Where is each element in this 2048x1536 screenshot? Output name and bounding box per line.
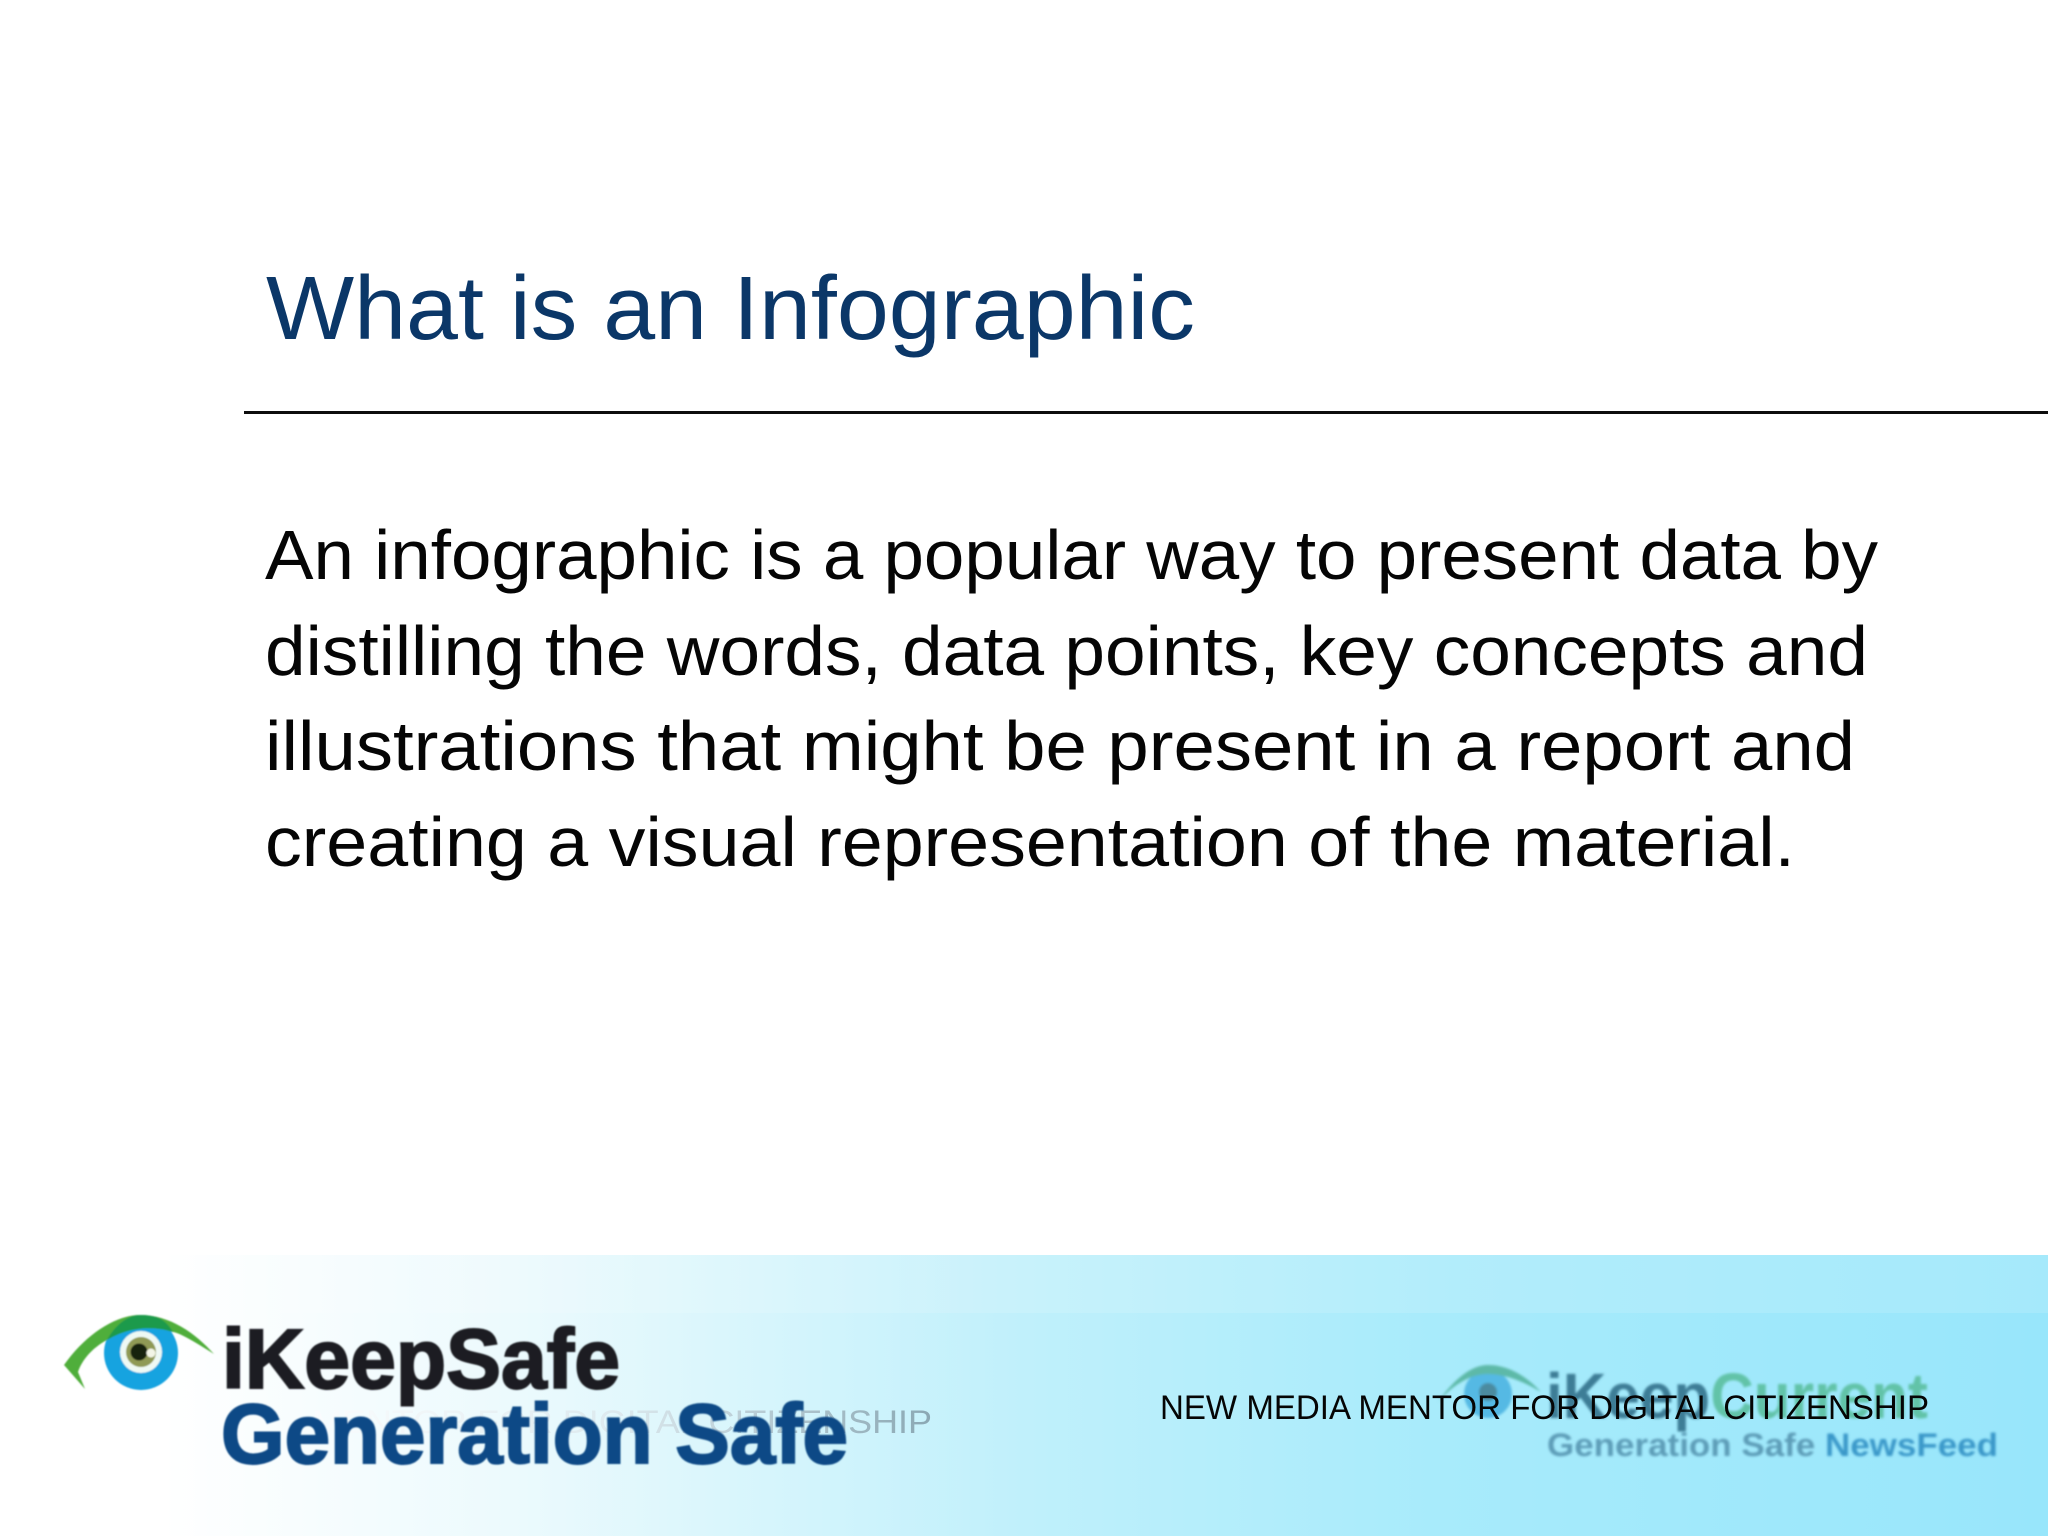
icon: eye [64,1315,214,1390]
logo: iKeepSafe Generation Safe [64,1312,848,1481]
body text: creating a visual representation of the material. [265,803,1795,881]
body text: distilling the words, data points, key concepts and [265,612,1868,690]
icon: faded eye [1438,1365,1541,1418]
body text: An infographic is a popular way to present data by [265,516,1878,594]
logo wordmark: iKeepCurrent: iKeepCurrent [1546,1360,1928,1432]
body text [265,516,1878,881]
footer text: faint left caption: MENTOR FOR DIGITAL CITIZENSHIP [312,1404,932,1440]
footer text: right caption: NEW MEDIA MENTOR FOR DIGITAL CITIZENSHIP [1160,1389,1929,1427]
logo: iKeepCurrent Generation Safe NewsFeed [1438,1360,1998,1463]
logo wordmark: iKeepSafe: iKeepSafe [222,1312,620,1406]
title: What is an Infographic [266,259,1195,359]
logo wordmark: Generation Safe NewsFeed: Generation Safe NewsFeed [1547,1427,1998,1463]
title rule [244,411,2048,414]
logo wordmark: Generation Safe: Generation Safe [221,1387,848,1481]
footer band [0,1255,2048,1536]
body text: illustrations that might be present in a report and [265,707,1855,785]
